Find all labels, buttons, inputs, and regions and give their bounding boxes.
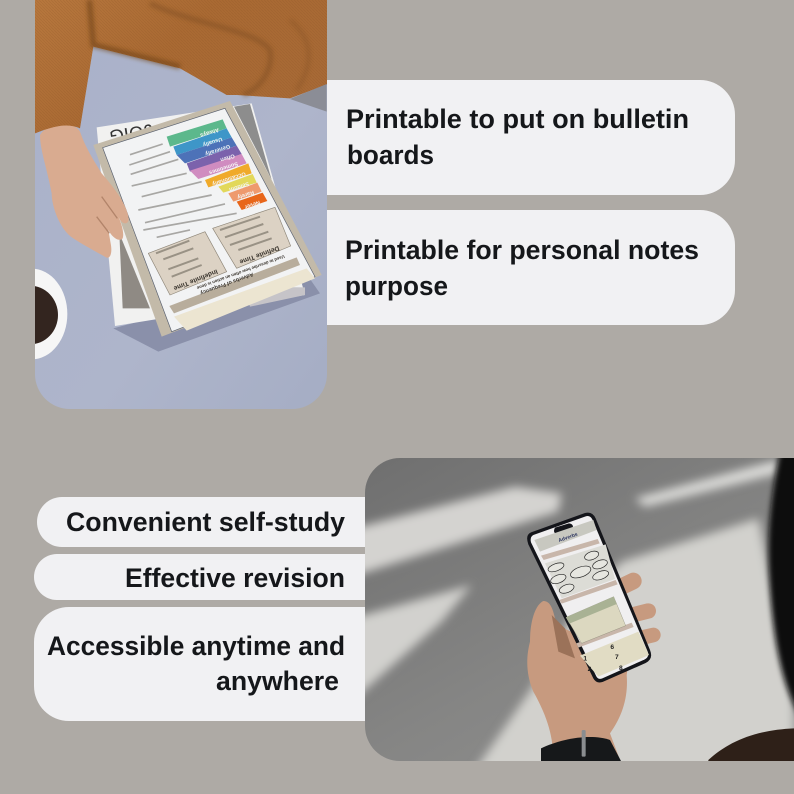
coffee cup: [35, 268, 68, 360]
panel: accessible anytime and anywhere: Accessible anytime and: [47, 631, 345, 661]
magazine shadow: [113, 277, 320, 352]
frequency colour bars: Often: [219, 152, 235, 163]
sleeve bottom right: [708, 728, 794, 765]
panel: photo of phone held in hand: [365, 458, 794, 761]
phone list numbers: 7: [615, 654, 619, 661]
panel: effective revision: [34, 554, 365, 600]
blurred floor: [365, 458, 794, 761]
phone list numbers: 8: [619, 665, 623, 672]
example sentence lines: [129, 144, 237, 237]
panel: convenient self-study: Convenient self-study: [66, 507, 345, 537]
phone list numbers: 2: [588, 666, 592, 673]
frequency colour bars: Generally: [203, 143, 231, 157]
panel: printable to put on bulletin boards: boards: [347, 140, 434, 170]
magazine under the sheet: [97, 103, 305, 326]
phone list block: [580, 632, 649, 677]
cream content strip: [174, 268, 315, 331]
desk surface: [35, 46, 327, 409]
phone table header: [566, 597, 617, 624]
phone list numbers: 6: [610, 644, 614, 651]
frequency colour bars: Never: [243, 199, 261, 210]
panel: effective revision: Effective revision: [125, 563, 345, 593]
watch strap: [541, 730, 621, 761]
panel: convenient self-study: [37, 497, 365, 547]
phone: Adverbs: [558, 532, 579, 544]
adverbs of frequency banner: [169, 257, 300, 313]
panel: accessible anytime and anywhere: anywhere: [216, 666, 339, 696]
phone mind map: [545, 544, 615, 598]
panel: printable for personal notes: [327, 210, 735, 325]
phone notch: [554, 523, 573, 534]
panel: accessible anytime and anywhere: [34, 607, 365, 721]
panel: photo of printed sheet on a desk: [35, 0, 327, 409]
sleeve under desk edge: [290, 84, 327, 112]
phone section bars: [541, 539, 600, 560]
magazine under the sheet: JOIG: [108, 120, 154, 148]
panel: printable for personal notes: purpose: [345, 271, 448, 301]
panel: printable to put on bulletin boards: [327, 80, 735, 195]
frequency colour bars: Usually: [201, 135, 223, 148]
phone: [527, 513, 651, 682]
frequency colour bars: Rarely: [235, 189, 255, 200]
phone table: [566, 597, 626, 643]
phone list numbers: 1: [583, 656, 587, 663]
adverbs of frequency banner: Adverbs of Frequency: [199, 271, 254, 296]
hand on the sheet: [40, 124, 129, 258]
usage note line: Used to describe how often an action is done: [196, 254, 285, 291]
frequency colour bars: Seldom: [228, 180, 250, 192]
sweater: [30, 0, 330, 133]
frequency colour bars: Always: [199, 126, 220, 138]
indefinite time box: [148, 232, 227, 295]
frequency colour bars: Occasionally: [210, 170, 246, 187]
frequency colour bars: [167, 119, 267, 210]
holding hand behind the phone: [527, 581, 653, 760]
phone title block: [534, 520, 597, 552]
sunlight streaks: [352, 460, 794, 775]
printed sheet: [93, 101, 322, 337]
panel: printable to put on bulletin boards: Printable to put on bulletin: [346, 104, 689, 134]
panel: printable for personal notes: Printable for personal notes: [345, 235, 699, 265]
definite time box: [213, 207, 291, 268]
definite time box: Definite Time: [238, 244, 280, 265]
indefinite time box: Indefinite Time: [172, 267, 219, 292]
phone list numbers: [584, 644, 622, 671]
person in foreground: [769, 445, 794, 732]
frequency colour bars: Sometimes: [208, 160, 239, 175]
